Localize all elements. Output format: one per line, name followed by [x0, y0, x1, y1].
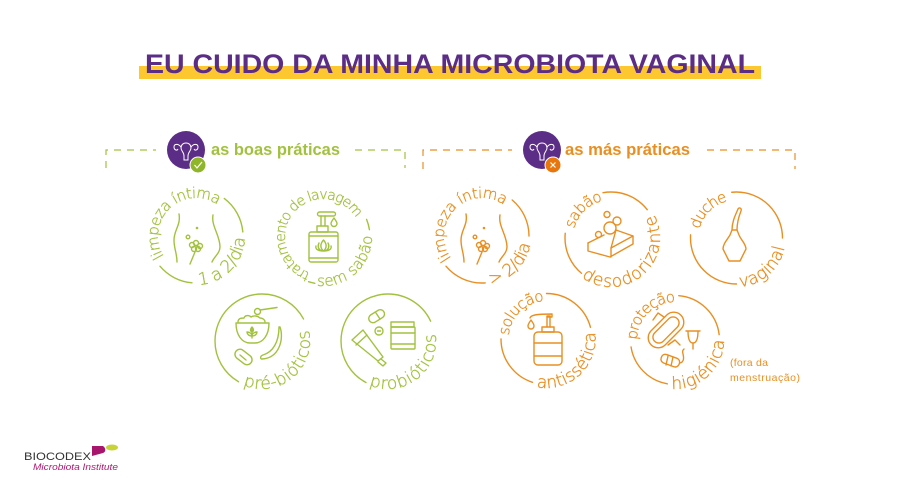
icon: soap with bubbles: [588, 212, 633, 257]
item: pré-bióticos: [214, 293, 310, 390]
item: proteção higiénica: higiénica: [672, 341, 724, 390]
item: limpeza íntima > 2/dia: > 2/dia: [489, 244, 530, 284]
icon: bowl, banana and capsule: [233, 308, 281, 367]
item: limpeza íntima 1 a 2/dia: limpeza íntima: [150, 186, 220, 261]
logo: Biocodex Microbiota Institute: Microbiota Institute: [33, 462, 118, 473]
item: sabão desodorizante: [564, 191, 660, 288]
logo: Biocodex Microbiota Institute: BIOCODEX: [24, 451, 92, 463]
icon: body with flower: [174, 214, 220, 264]
item: tratamento de lavagem sem sabão: sem sabão: [318, 236, 372, 286]
icon: vaginal douche bulb: [723, 208, 746, 261]
item: pré-bióticos: pré-bióticos: [244, 331, 310, 390]
logo: Biocodex Microbiota Institute: [24, 444, 118, 473]
note: fora da menstruação: menstruação): [730, 372, 800, 384]
item: limpeza íntima 1 a 2/dia: [150, 186, 246, 285]
item: sabão desodorizante: sabão: [566, 194, 601, 228]
icon: pad, cup and tampon: [644, 308, 700, 368]
panel: as más práticas: [422, 131, 800, 390]
icon: antiseptic bottle: [528, 314, 562, 365]
item: sabão desodorizante: desodorizante: [584, 216, 660, 288]
icon: body with flower: [461, 214, 507, 264]
heading: as boas práticas: as boas práticas: [211, 140, 340, 159]
note: fora da menstruação: (fora da: [730, 357, 768, 369]
item: probióticos: [340, 293, 436, 390]
item: probióticos: probióticos: [370, 335, 436, 390]
item: tratamento de lavagem sem sabão: tratamento de lavagem: [276, 190, 361, 282]
heading: as más práticas: as más práticas: [565, 140, 690, 159]
item: proteção higiénica: [628, 292, 800, 390]
heading: as boas práticas: [106, 131, 405, 173]
title: EU CUIDO DA MINHA MICROBIOTA VAGINAL: [145, 49, 755, 79]
item: duche vaginal: [690, 191, 784, 286]
panel: as boas práticas: [105, 131, 436, 390]
item: solução antissética: [500, 292, 596, 388]
item: duche vaginal: vaginal: [739, 246, 784, 286]
item: solução antissética: antissética: [538, 334, 596, 388]
item: solução antissética: solução: [500, 292, 542, 335]
icon: pump bottle with lotus: [309, 212, 338, 262]
item: proteção higiénica: proteção: [628, 292, 674, 339]
heading: as más práticas: [423, 131, 795, 173]
item: limpeza íntima 1 a 2/dia: 1 a 2/dia: [198, 238, 246, 285]
item: duche vaginal: duche: [690, 194, 726, 228]
item: limpeza íntima > 2/dia: limpeza íntima: [436, 186, 506, 264]
icon: capsule, jar and tube: [352, 308, 415, 366]
item: limpeza íntima > 2/dia: [436, 186, 530, 284]
note: fora da menstruação: [730, 357, 800, 384]
